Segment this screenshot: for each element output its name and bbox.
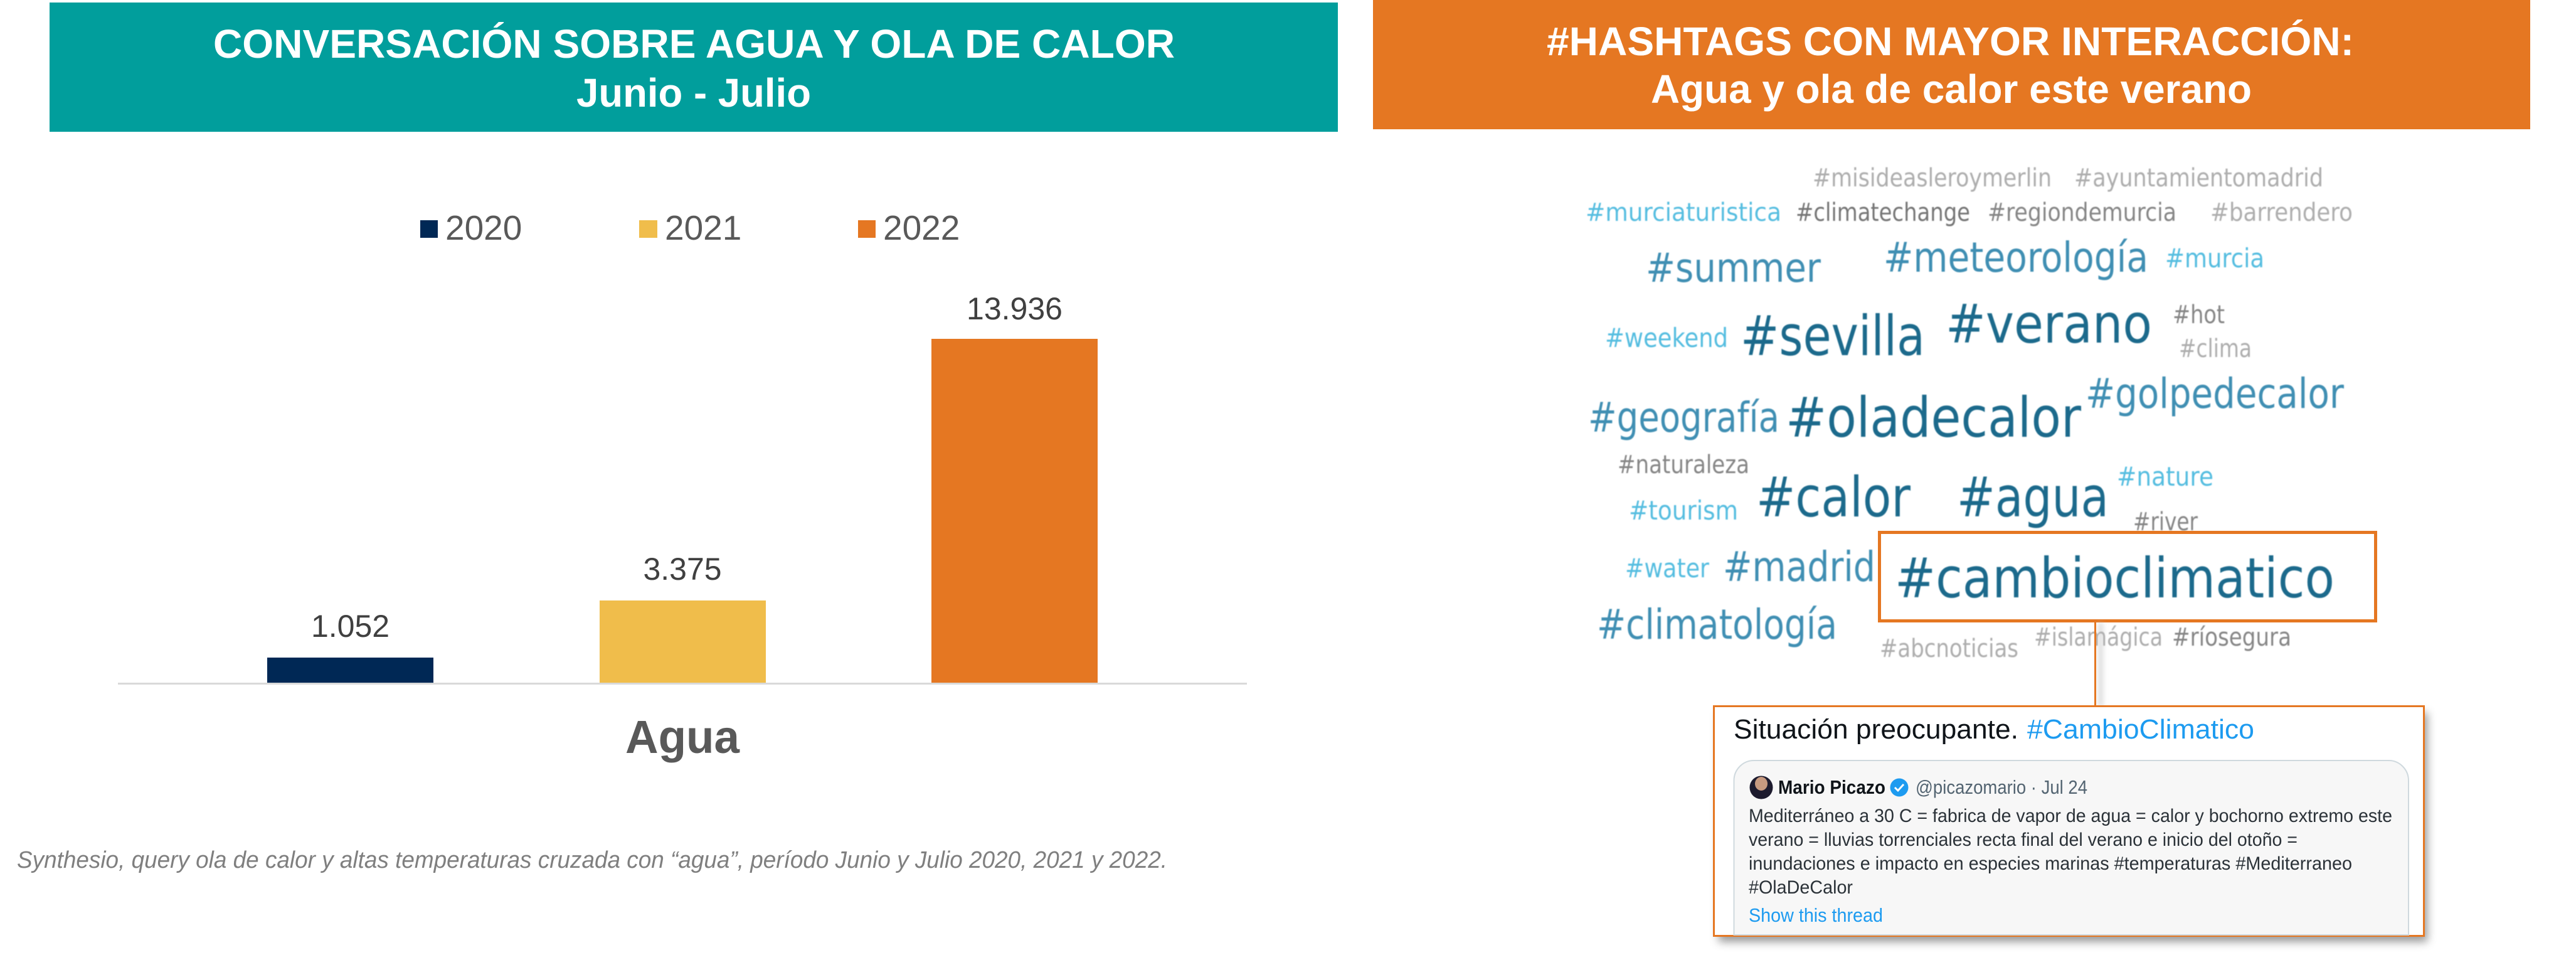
bar 2020 [267, 609, 433, 683]
tweet body text: #OlaDeCalor [1749, 877, 1853, 898]
connector line from hashtag to tweet [2094, 622, 2103, 707]
hashtag word cloud: #barrendero [2210, 198, 2353, 227]
author name: Mario Picazo [1778, 776, 1885, 798]
tweet hashtag: #CambioClimatico [2027, 714, 2254, 745]
hashtag word cloud: #climatechange [1796, 198, 1970, 227]
hashtag word cloud: #sevilla [1741, 304, 1925, 368]
bar 2022: 13.936 [967, 291, 1063, 326]
hashtag word cloud: #verano [1946, 293, 2152, 356]
tweet comment text: Situación preocupante. [1734, 714, 2018, 745]
right header subtitle: Agua y ola de calor este verano [1651, 67, 2252, 112]
hashtag word cloud: #misideasleroymerlin [1813, 164, 2052, 193]
right header banner [1373, 0, 2530, 129]
hashtag word cloud: #tourism [1629, 495, 1738, 526]
right header title: #HASHTAGS CON MAYOR INTERACCIÓN: [1547, 19, 2354, 64]
show thread link: Show this thread [1749, 904, 1883, 926]
icon: verified badge [1890, 778, 1908, 797]
source footnote: Synthesio, query ola de calor y altas temperaturas cruzada con “agua”, período Junio y Julio 2020, 2021 y 2022. [17, 847, 1167, 873]
hashtag word cloud: #madrid [1723, 543, 1875, 591]
author handle and date: @picazomario · Jul 24 [1916, 776, 2087, 798]
category label: Agua [625, 711, 740, 763]
hashtag word cloud: #murciaturistica [1586, 198, 1781, 227]
hashtag word cloud: #summer [1646, 245, 1821, 292]
chart legend: 2022 [883, 208, 960, 247]
bar 2022 [931, 291, 1098, 683]
hashtag word cloud: #climatología [1597, 600, 1837, 649]
hashtag word cloud: #ríosegura [2172, 623, 2291, 652]
hashtag word cloud: #calor [1756, 465, 1911, 530]
hashtag word cloud: #agua [1957, 465, 2109, 530]
left header title: CONVERSACIÓN SOBRE AGUA Y OLA DE CALOR [213, 21, 1175, 67]
left header subtitle: Junio - Julio [576, 70, 811, 115]
chart legend: 2020 [445, 208, 522, 247]
hashtag word cloud: #regiondemurcia [1988, 198, 2176, 227]
icon: avatar [1750, 776, 1773, 799]
hashtag word cloud: #river [2133, 508, 2198, 536]
chart legend [420, 208, 960, 247]
hashtag word cloud: #naturaleza [1618, 451, 1749, 479]
hashtag word cloud: #golpedecalor [2086, 370, 2345, 418]
bar 2021: 3.375 [643, 552, 722, 587]
tweet callout panel [1714, 707, 2427, 942]
hashtag word cloud: #hot [2173, 301, 2225, 329]
hashtag word cloud: #meteorología [1884, 233, 2148, 282]
hashtag word cloud: #nature [2117, 461, 2213, 492]
bar chart: Agua [118, 291, 1247, 763]
hashtag word cloud: #ayuntamientomadrid [2074, 164, 2323, 193]
hashtag word cloud: #abcnoticias [1880, 634, 2018, 663]
hashtag word cloud [1586, 164, 2353, 663]
left header banner [50, 3, 1338, 132]
hashtag word cloud: #cambioclimatico [1895, 546, 2335, 611]
hashtag word cloud: #geografía [1588, 393, 1779, 442]
tweet body text [1749, 806, 2392, 898]
tweet body text: inundaciones e impacto en especies marinas #temperaturas #Mediterraneo [1749, 853, 2352, 874]
highlight box around #cambioclimatico [1879, 532, 2376, 621]
hashtag word cloud: #murcia [2165, 243, 2264, 274]
hashtag word cloud: #oladecalor [1786, 385, 2082, 450]
hashtag word cloud: #weekend [1605, 323, 1728, 353]
hashtag word cloud: #clima [2179, 334, 2252, 363]
chart legend: 2021 [665, 208, 741, 247]
quoted tweet card [1734, 760, 2409, 935]
tweet body text: verano = lluvias torrenciales recta final del verano e inicio del otoño = [1749, 830, 2298, 850]
bar 2020: 1.052 [311, 609, 390, 644]
hashtag word cloud: #islamágica [2034, 623, 2163, 652]
hashtag word cloud: #water [1625, 553, 1710, 584]
bar 2021 [600, 552, 766, 683]
tweet body text: Mediterráneo a 30 C = fabrica de vapor de agua = calor y bochorno extremo este [1749, 806, 2392, 826]
